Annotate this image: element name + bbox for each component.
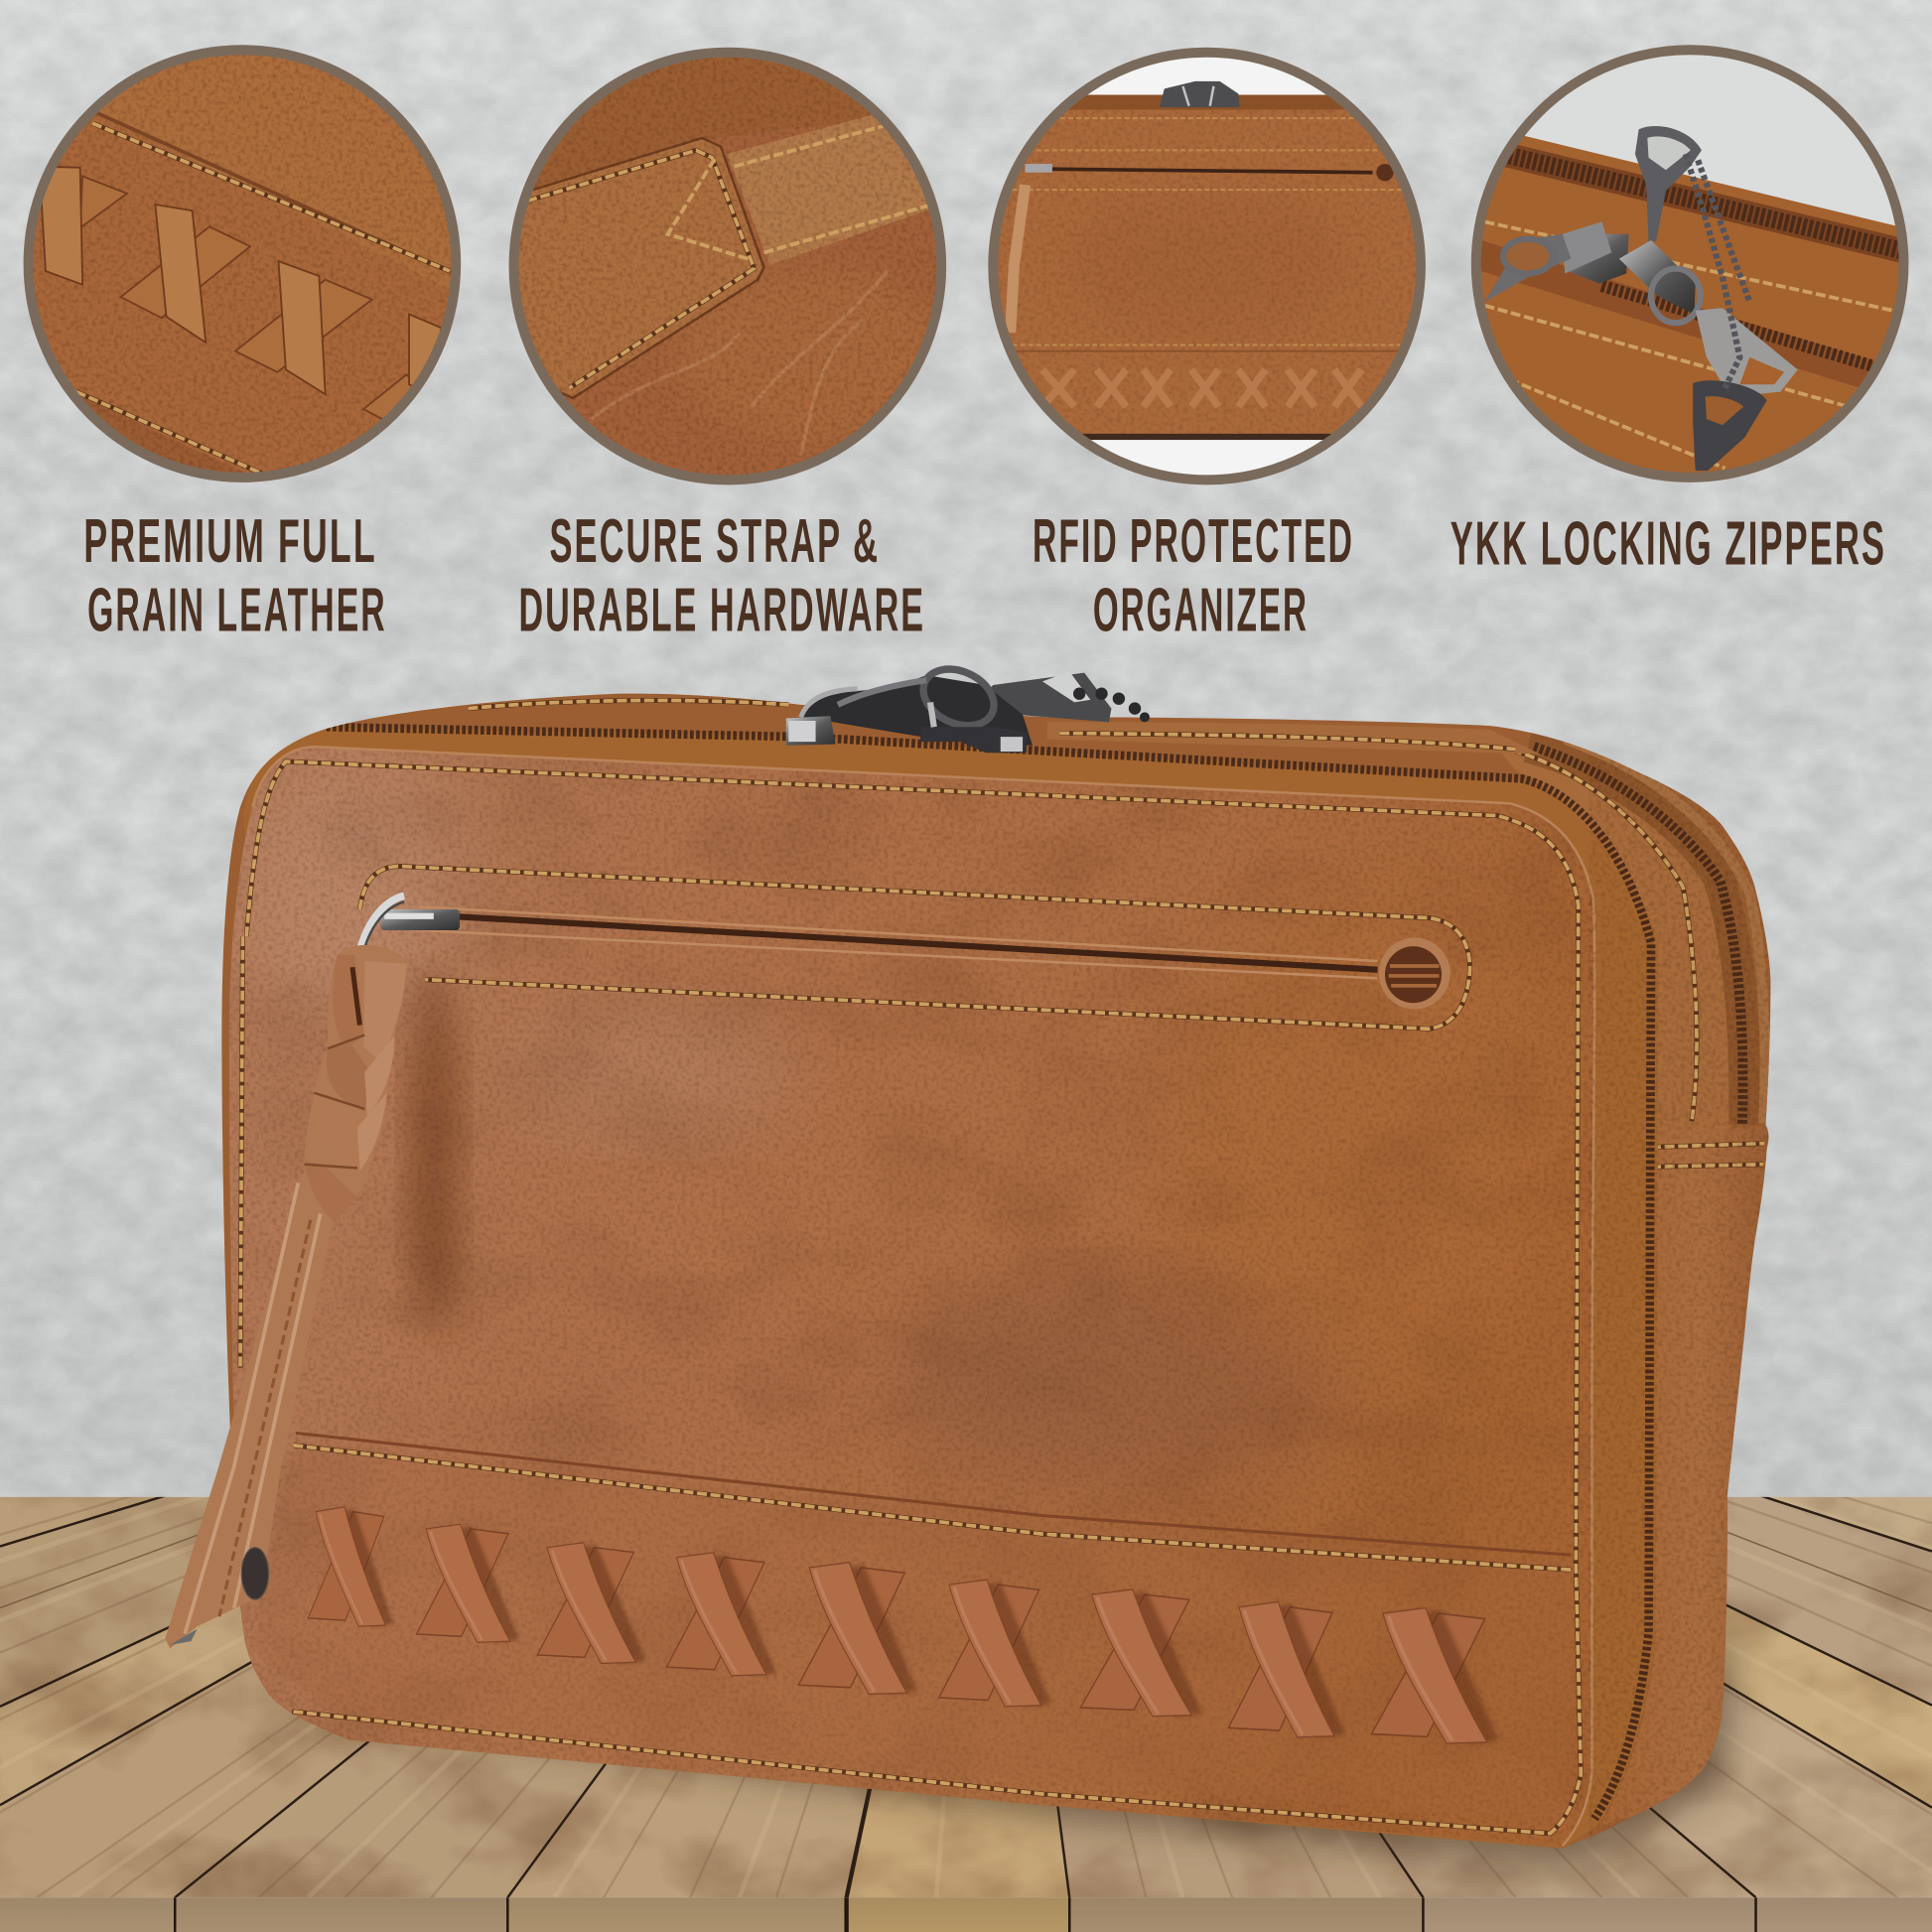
- table front face: [0, 1897, 1932, 1932]
- side pocket: [1599, 1125, 1768, 1826]
- feature: RFID protected organizer: [988, 48, 1427, 644]
- label: GRAIN LEATHER: [87, 576, 387, 644]
- wall background: [0, 0, 1932, 1497]
- table planks: [0, 1497, 1932, 1898]
- circle frame: [993, 53, 1421, 480]
- circle frame: [1476, 50, 1903, 478]
- detail photo: strap tab: [509, 48, 949, 486]
- panel stitching: [240, 761, 1581, 1834]
- detail photo: leather stitching: [34, 55, 451, 473]
- main zipper tape: [242, 727, 1658, 1849]
- label: SECURE STRAP &: [550, 507, 880, 576]
- bag shadow on table: [265, 1626, 1737, 1866]
- feature: premium full grain leather: [24, 46, 469, 644]
- feature: YKK locking zippers: [1450, 46, 1910, 578]
- snap rivet: [241, 1548, 269, 1599]
- label: [83, 507, 387, 644]
- label: RFID PROTECTED: [1033, 507, 1354, 576]
- circle frame: [514, 53, 941, 480]
- panel rim: [252, 747, 1594, 1846]
- label: DURABLE HARDWARE: [518, 576, 925, 644]
- detail photo: zipper pulls: [1471, 46, 1910, 484]
- front zipper pocket: [359, 866, 1470, 1029]
- braided leather pull: [165, 945, 407, 1649]
- feature: secure strap and durable hardware: [509, 48, 949, 644]
- top leather strip and stitching: [469, 700, 1540, 755]
- detail photo: front of bag: [988, 48, 1427, 486]
- label: PREMIUM FULL: [83, 507, 377, 576]
- label: [1033, 507, 1354, 644]
- label: [518, 507, 925, 644]
- zipper slider: [357, 896, 460, 964]
- bag body: [221, 694, 1770, 1849]
- label: ORGANIZER: [1093, 576, 1309, 644]
- side gusset and rear zipper: [1472, 740, 1765, 1140]
- front panel: [209, 727, 1614, 1861]
- leather bag: [165, 658, 1787, 1861]
- circle frame: [29, 50, 456, 478]
- wooden table: [0, 1497, 1932, 1932]
- bag leather grain overlay: [1588, 753, 1771, 1837]
- locking zipper hardware: [786, 658, 1150, 753]
- cross-stitch row: [308, 1507, 1499, 1743]
